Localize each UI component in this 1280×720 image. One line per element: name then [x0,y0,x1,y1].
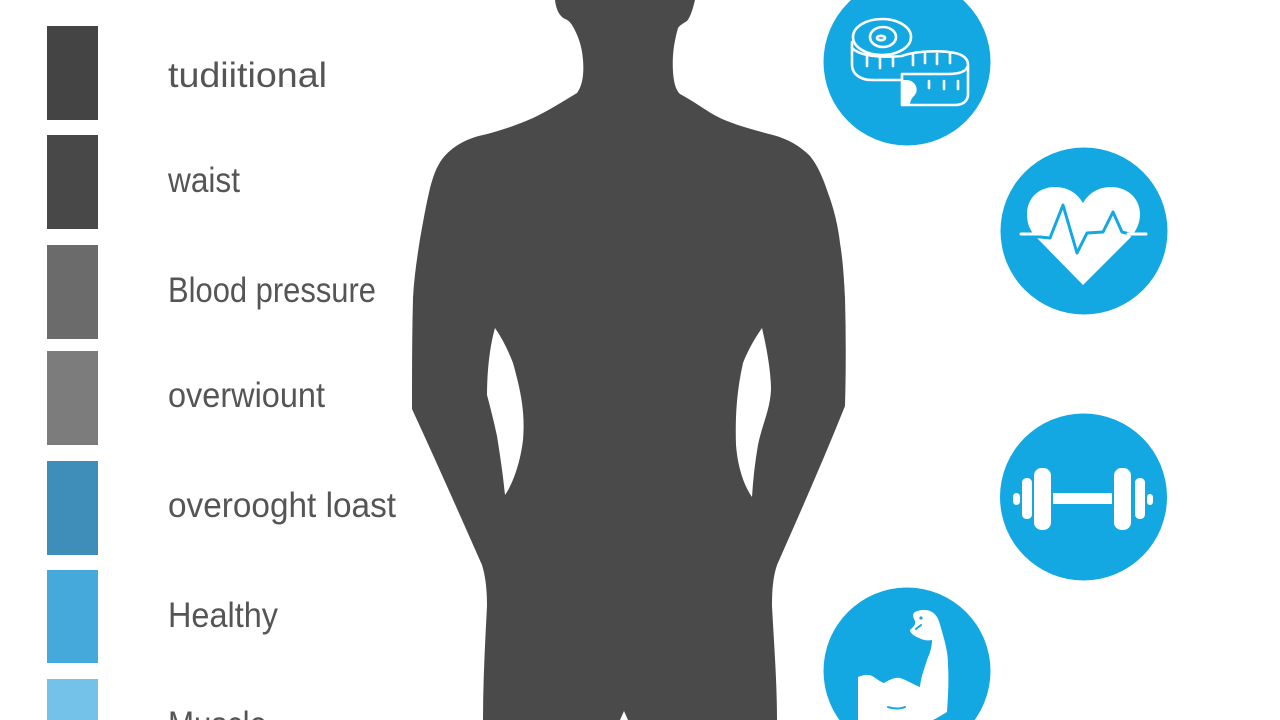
swatch: blood pressure [47,245,98,339]
swatch: traditional [47,26,98,120]
swatch: overwiount [47,351,98,445]
label: overwiount: overwiount [168,376,325,415]
icon: heart with pulse [1000,148,1168,314]
icon: measuring tape [824,0,990,146]
label: healthy: Healthy [168,596,278,635]
label: overooght loast: overooght loast [168,486,396,525]
icon: flexed muscle arm [824,588,990,720]
human body silhouette [412,0,846,720]
swatch: healthy [47,570,98,663]
swatch: waist [47,135,98,229]
icon: dumbbell [1000,414,1167,580]
swatch: overooght loast [47,461,98,555]
label: traditional: tudiitional [168,56,327,95]
swatch: muscle [47,679,98,720]
label: blood pressure: Blood pressure [168,271,376,310]
label: waist: waist [167,161,240,200]
legend: swatches and labels [47,26,396,720]
